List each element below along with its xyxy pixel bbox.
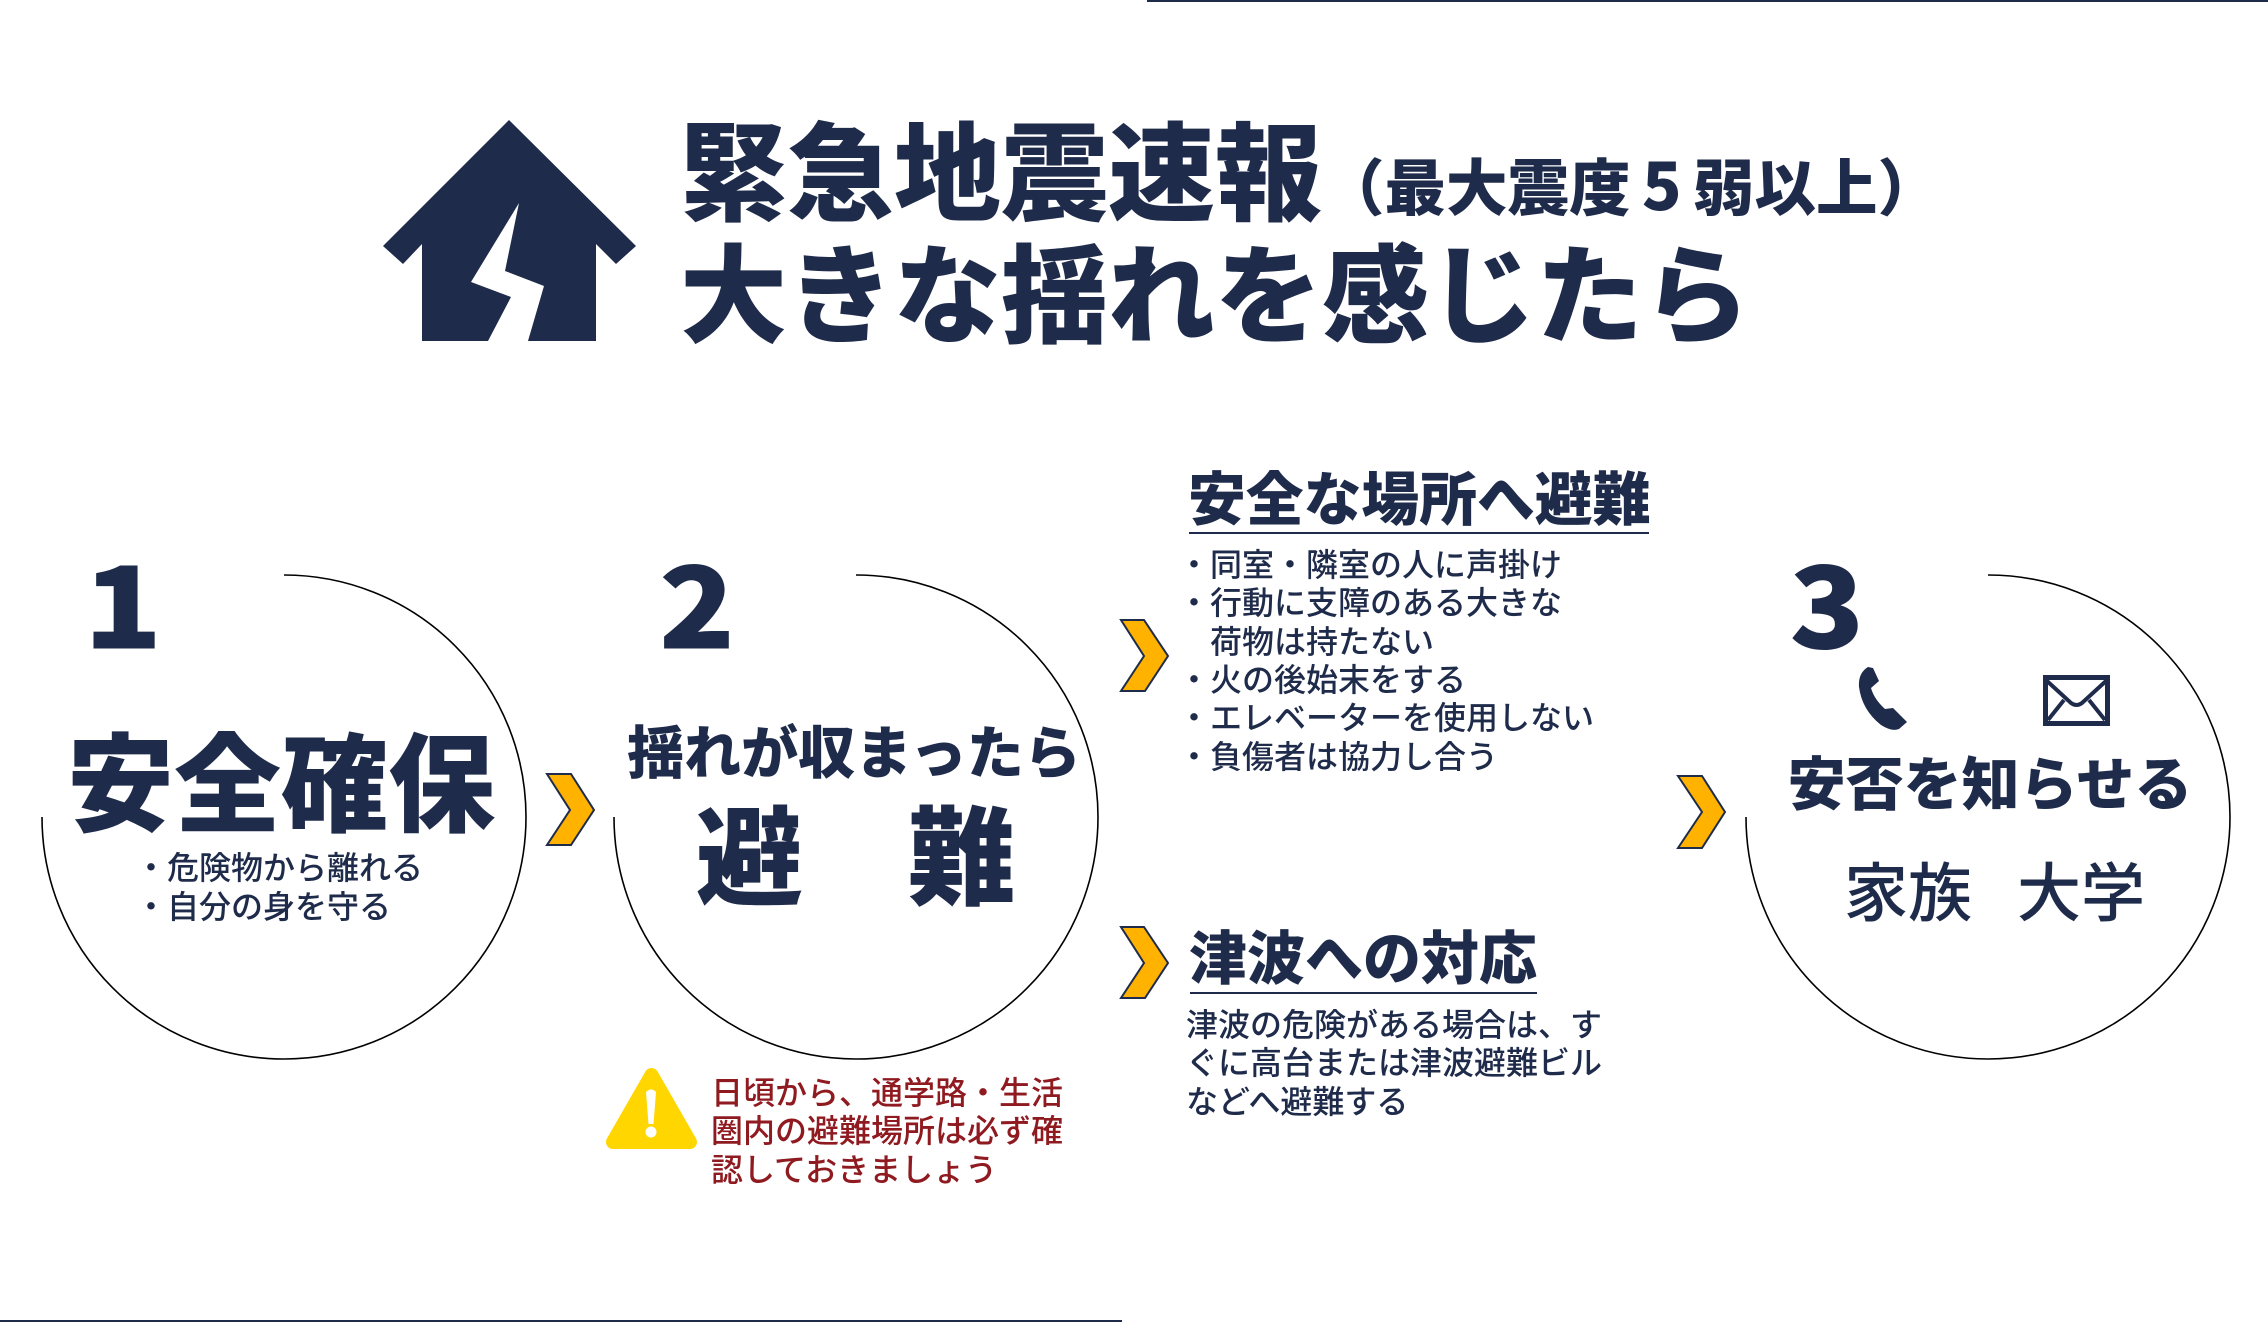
step 1 bullets: ・危険物から離れる [135,850,423,886]
icon: phone [1859,667,1907,730]
circle arc 1 [42,575,526,1059]
number 2: 2 [659,521,735,680]
circle arc 2 [614,575,1098,1059]
title qualifier: （最大震度 [1323,155,1631,224]
panel: evacuate to safe place [1178,469,1650,775]
panel: tsunami response [1186,927,1602,1120]
panel: step 1 safety [42,521,526,1059]
callout text [711,1075,1063,1188]
icon: warning triangle [613,1075,690,1142]
evacuation checklist: ・火の後始末をする [1178,662,1466,698]
callout text: 認しておきましょう [711,1152,997,1188]
circle arc 3 [1746,575,2230,1059]
step 1 bullets [135,850,423,925]
title [680,115,1939,357]
subheading: 揺れが収まったら [627,722,1081,786]
title qualifier: 5 [1642,135,1682,229]
callout text: 日頃から、通学路・生活 [711,1075,1063,1111]
callout: everyday preparation [613,1075,1063,1188]
title line 1: 緊急地震速報 [680,115,1322,235]
evacuation checklist: ・同室・隣室の人に声掛け [1178,547,1562,583]
heading: notify: 安否を知らせる [1788,753,2192,818]
tsunami text: などへ避難する [1186,1084,1408,1120]
heading: 安全確保: 安全確保 [67,726,495,846]
heading underline [1190,992,1537,994]
evacuation checklist: 荷物は持たない [1210,624,1434,660]
arrow 1 to 2 [547,774,594,845]
tsunami text: 津波の危険がある場合は、す [1186,1007,1602,1043]
number 1: 1 [84,521,162,680]
evacuation checklist [1178,547,1594,775]
title qualifier: 弱以上） [1693,155,1939,224]
evacuation checklist: ・負傷者は協力し合う [1178,739,1498,775]
arrow 2 to 3 [1678,776,1725,848]
tsunami text: ぐに高台または津波避難ビル [1186,1045,1602,1081]
university label: 大学 [2017,858,2145,930]
heading underline [1189,532,1649,534]
evacuation checklist: ・エレベーターを使用しない [1178,700,1594,736]
heading: tsunami: 津波への対応 [1189,927,1537,992]
icon: cracked house [383,120,636,341]
heading: safe place: 安全な場所へ避難 [1188,469,1650,533]
arrow to tsunami [1121,927,1168,998]
heading: 避難: 難 [908,799,1015,919]
heading: 避難 [696,799,1015,919]
arrow to safe evacuation [1121,620,1168,691]
family label: 家族 [1844,858,1972,930]
title line 2: 大きな揺れを感じたら [680,237,1750,357]
panel: step 2 evacuate [614,521,1098,1059]
step 1 bullets: ・自分の身を守る [135,889,391,925]
callout text: 圏内の避難場所は必ず確 [711,1113,1063,1149]
icon: mail [2046,678,2108,724]
panel: step 3 notify [1746,521,2230,1059]
evacuation checklist: ・行動に支障のある大きな [1178,585,1562,621]
heading: 避難: 避 [696,799,803,919]
number 3: 3 [1790,521,1864,680]
tsunami text [1186,1007,1602,1120]
